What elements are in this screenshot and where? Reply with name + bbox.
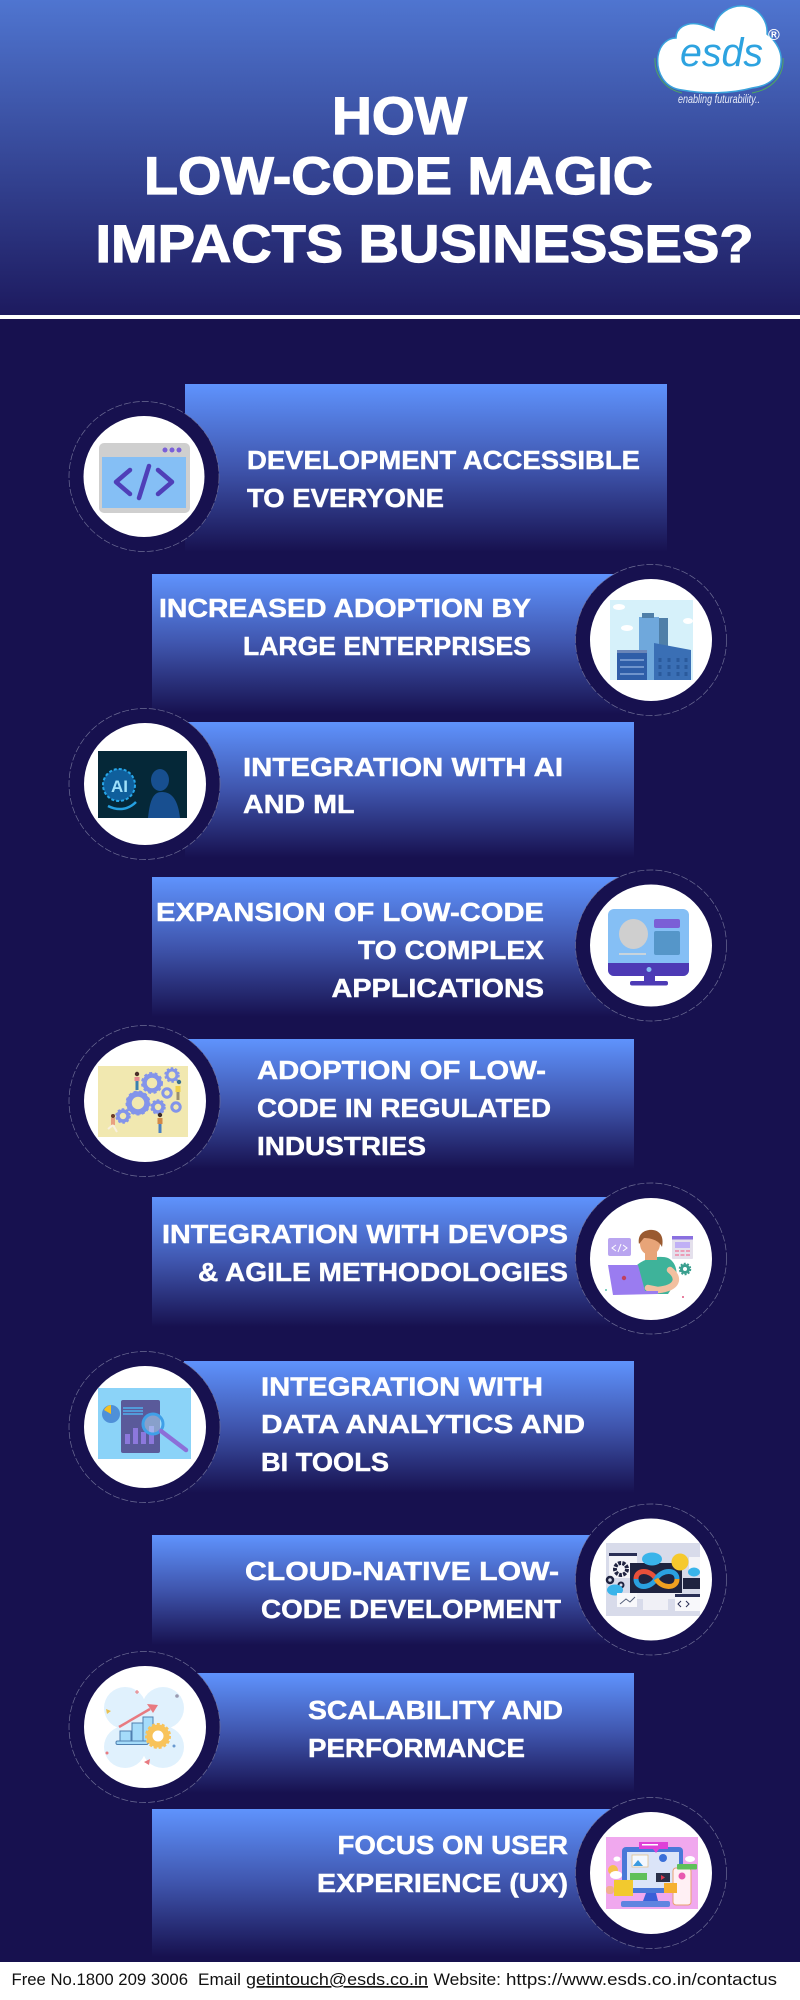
panel: integration with devops and agile methodologies: & AGILE METHODOLOGIES [198,1257,568,1287]
logo: esds cloud: ® [768,27,780,44]
panel: expansion of low-code to complex applications: EXPANSION OF LOW-CODE [156,897,544,927]
panel: adoption of low-code in regulated industries: INDUSTRIES [257,1131,426,1161]
panel: integration with devops and agile methodologies [152,1183,726,1334]
title: HOW [332,87,467,146]
header band [0,0,800,315]
panel: integration with data analytics and BI tools: INTEGRATION WITH [261,1372,543,1402]
title: LOW-CODE MAGIC [144,147,653,206]
icon: cloud devops infinity [606,1543,700,1616]
panel: scalability and performance: SCALABILITY AND [308,1695,563,1725]
panel: adoption of low-code in regulated industries: CODE IN REGULATED [257,1093,551,1123]
icon: office buildings [610,600,693,680]
panel: focus on user experience: FOCUS ON USER [338,1830,568,1860]
panel: increased adoption by large enterprises [152,564,726,716]
panel: expansion of low-code to complex applications: APPLICATIONS [332,973,544,1003]
panel: cloud-native low-code development: CLOUD-NATIVE LOW- [245,1556,559,1586]
icon: AI robot [98,751,187,818]
panel: scalability and performance: PERFORMANCE [308,1733,525,1763]
footer contact bar: Website: [434,1970,501,1989]
icon: growth chart and gear [104,1687,184,1768]
footer contact bar: Email [198,1970,241,1989]
panel: integration with devops and agile methodologies: INTEGRATION WITH DEVOPS [162,1219,568,1249]
panel: cloud-native low-code development: CODE DEVELOPMENT [261,1594,561,1624]
panel: integration with AI and ML: INTEGRATION WITH AI [243,752,563,782]
footer contact bar: getintouch@esds.co.in [246,1970,428,1989]
panel: integration with data analytics and BI tools [69,1352,634,1502]
panel: adoption of low-code in regulated industries: ADOPTION OF LOW- [257,1055,546,1085]
panel: focus on user experience [152,1798,726,1957]
panel: expansion of low-code to complex applications [152,870,726,1021]
panel: adoption of low-code in regulated industries [69,1026,634,1176]
panel: scalability and performance [69,1652,634,1802]
logo: esds cloud [655,6,783,106]
title: IMPACTS BUSINESSES? [96,215,754,274]
logo: esds cloud: esds [680,31,763,75]
title [96,87,754,274]
panel: integration with AI and ML: AND ML [243,789,355,819]
panel: cloud-native low-code development [152,1504,726,1655]
icon: people and gears [98,1066,188,1137]
footer contact bar: Free No.1800 209 3006 [12,1970,188,1989]
logo: esds cloud: enabling futurability.. [678,92,760,106]
panel: integration with AI and ML [69,708,634,860]
panel: development accessible to everyone [69,384,667,552]
panel: integration with data analytics and BI tools: DATA ANALYTICS AND [261,1409,585,1439]
icon: monitor [608,909,689,986]
panel: increased adoption by large enterprises: INCREASED ADOPTION BY [159,593,531,623]
footer contact bar: https://www.esds.co.in/contactus [506,1970,777,1989]
panel: development accessible to everyone: TO EVERYONE [247,483,444,513]
panel: development accessible to everyone: DEVELOPMENT ACCESSIBLE [247,445,640,475]
icon: analytics magnifier [98,1388,191,1459]
icon: UX monitor [606,1837,698,1909]
panel: increased adoption by large enterprises: LARGE ENTERPRISES [243,631,531,661]
icon: developer with laptop [605,1230,693,1298]
panel: integration with data analytics and BI tools: BI TOOLS [261,1447,389,1477]
panel: expansion of low-code to complex applications: TO COMPLEX [358,935,545,965]
panel: focus on user experience: EXPERIENCE (UX) [317,1868,568,1898]
icon: AI robot: AI [111,777,128,796]
footer contact bar [0,1962,800,2000]
icon: code window [99,443,190,513]
